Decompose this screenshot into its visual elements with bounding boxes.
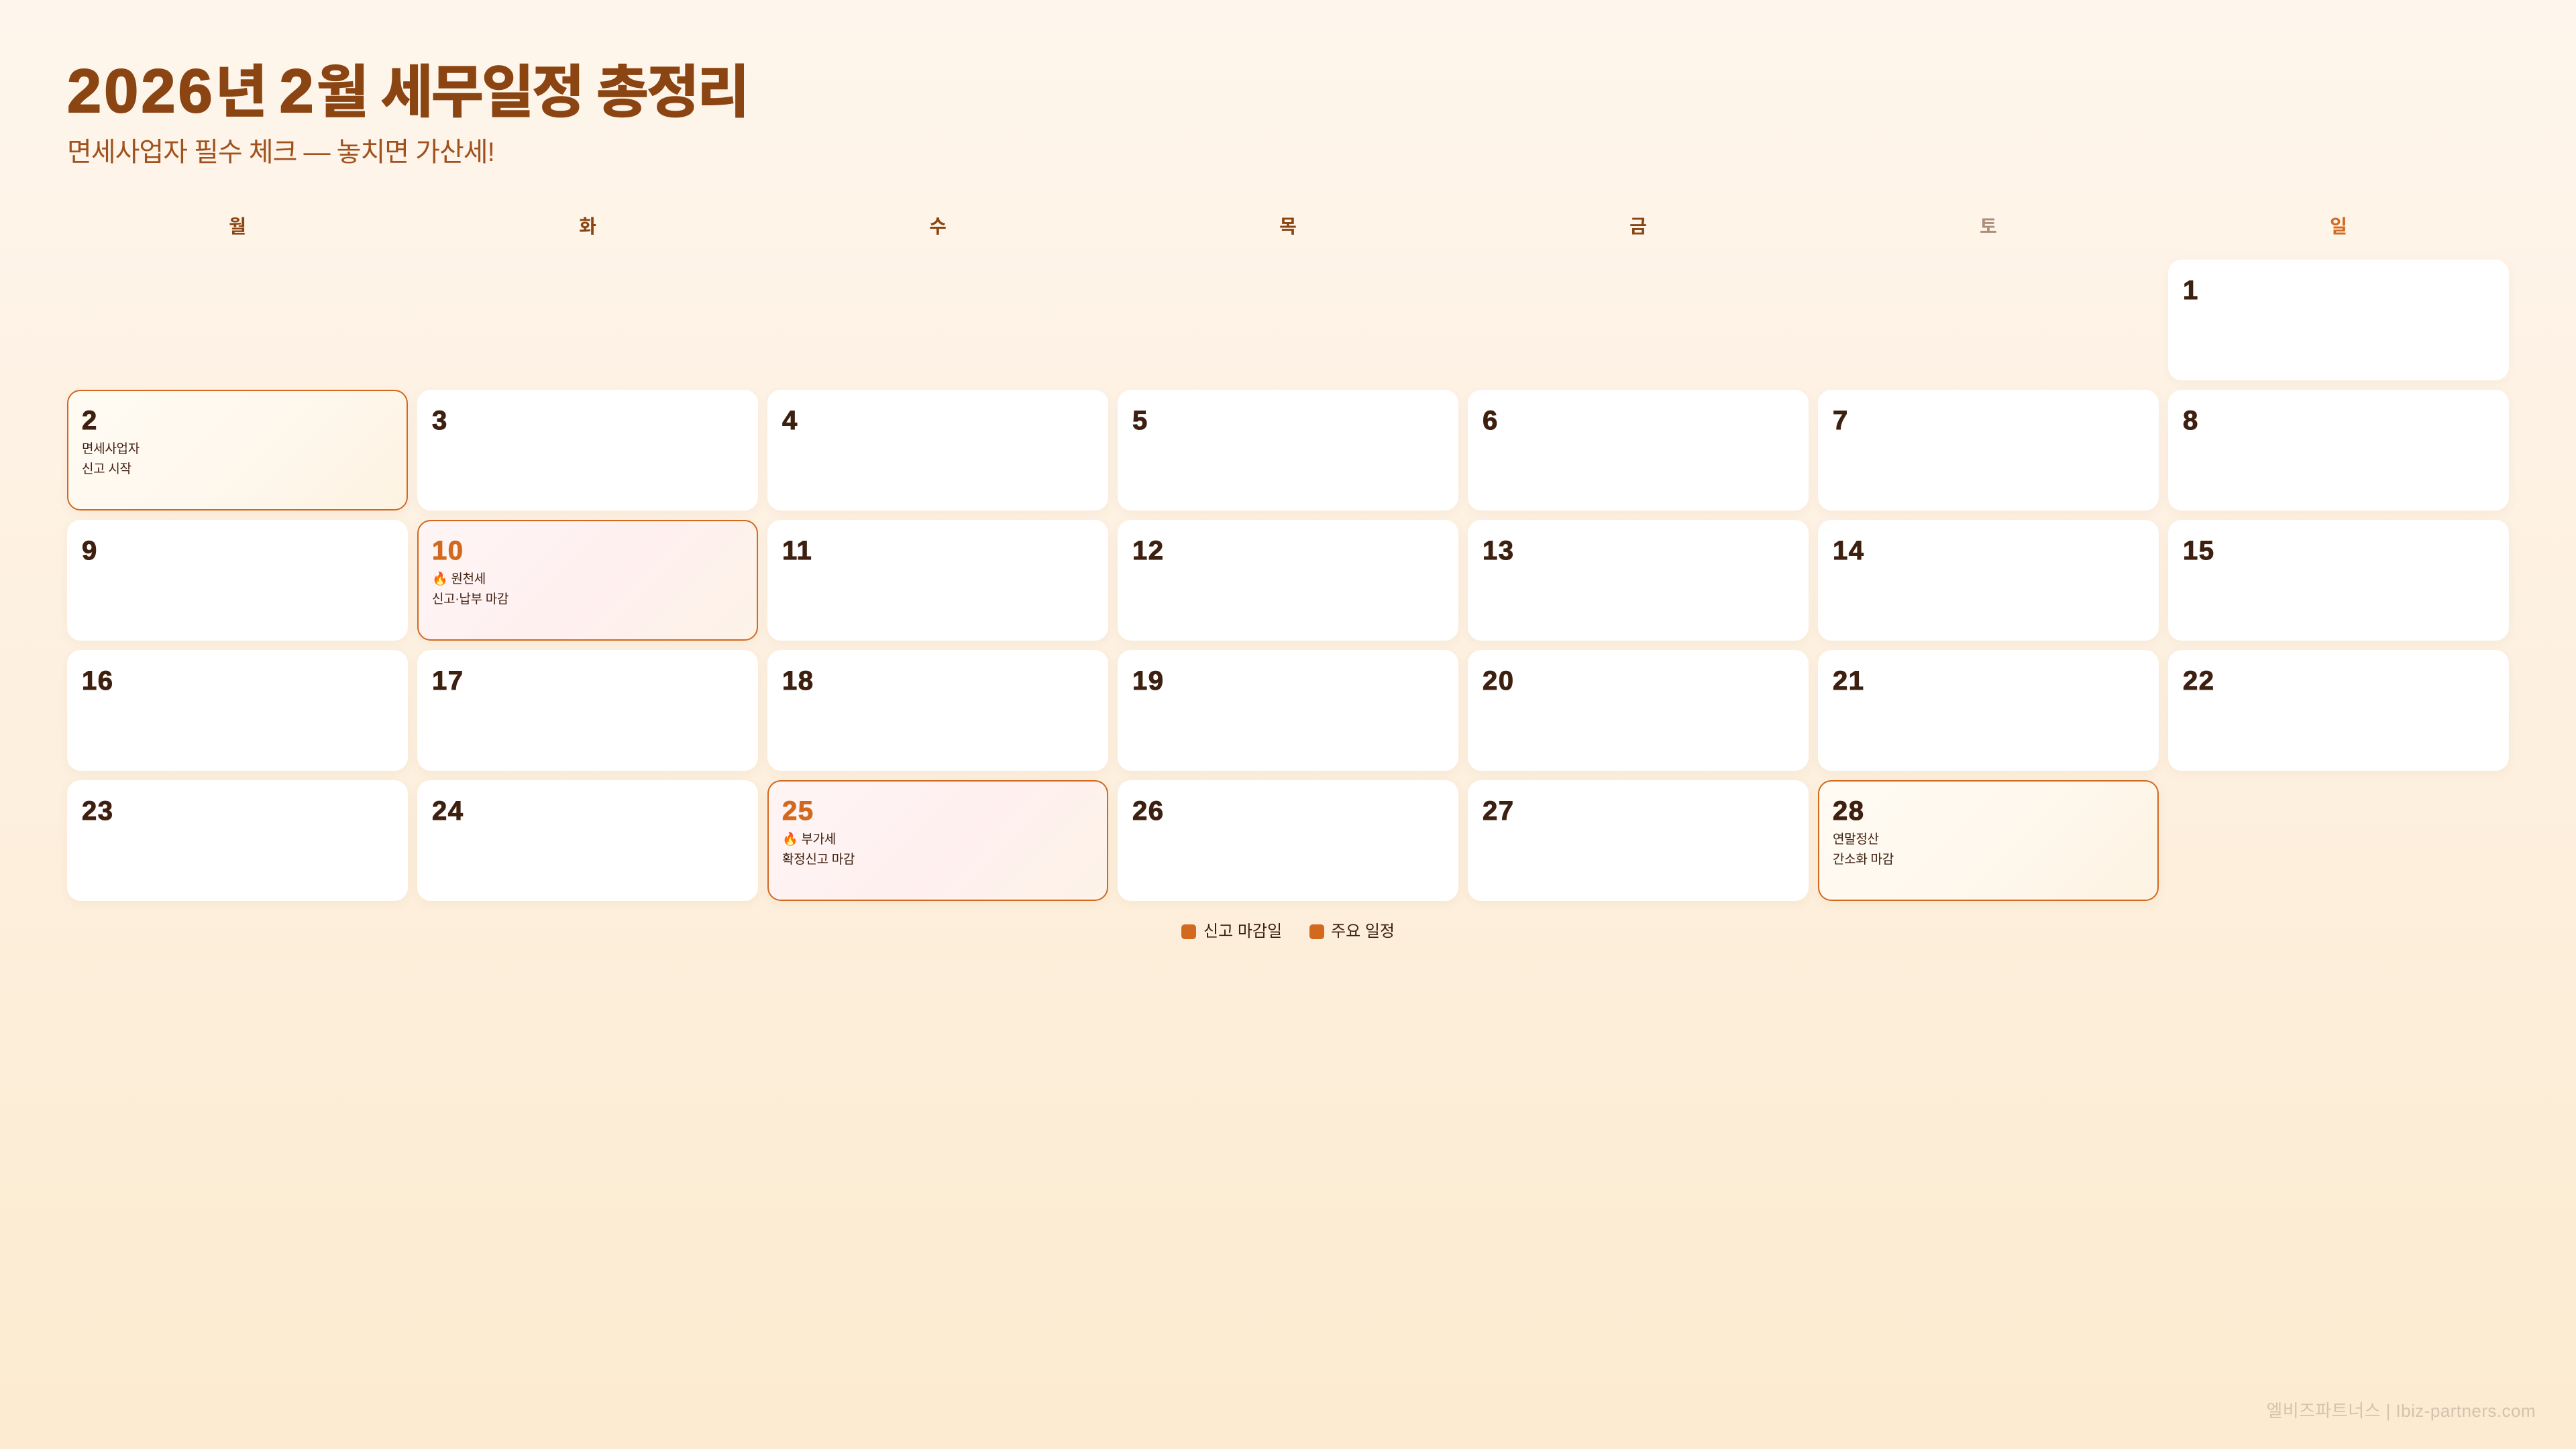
subtitle: 면세사업자 필수 체크 — 놓치면 가산세! <box>67 138 494 167</box>
day 6 <box>1468 390 1809 511</box>
day 12 <box>1118 520 1458 641</box>
day 25: VAT deadline: 확정신고 마감 <box>782 853 855 867</box>
day 23: 23 <box>82 796 114 826</box>
day 3: 3 <box>432 406 448 435</box>
day 18: 18 <box>782 666 814 696</box>
day 9 <box>67 520 408 641</box>
legend swatch: deadline <box>1181 924 1196 939</box>
day 28: year-end settlement: 간소화 마감 <box>1833 853 1894 867</box>
day 10: withholding tax deadline: 신고·납부 마감 <box>432 592 508 606</box>
day 10: withholding tax deadline <box>417 520 758 641</box>
legend label: deadline: 신고 마감일 <box>1203 922 1282 941</box>
day 21 <box>1818 650 2159 771</box>
day 6: 6 <box>1483 406 1499 435</box>
day 19 <box>1118 650 1458 771</box>
day 12: 12 <box>1132 536 1165 566</box>
weekday: Monday: 월 <box>229 216 246 237</box>
day 24 <box>417 780 758 901</box>
legend <box>1181 922 1395 941</box>
legend label: key date: 주요 일정 <box>1331 922 1395 941</box>
day 26 <box>1118 780 1458 901</box>
day 25: VAT deadline: 25 <box>782 796 814 826</box>
calendar grid <box>67 260 2509 901</box>
day 11 <box>767 520 1108 641</box>
day 24: 24 <box>432 796 464 826</box>
weekday: Wednesday: 수 <box>929 216 947 237</box>
day 13: 13 <box>1483 536 1515 566</box>
title: 2026년 2월 세무일정 총정리 <box>67 57 748 125</box>
day 26: 26 <box>1132 796 1165 826</box>
day 22 <box>2168 650 2509 771</box>
weekday header row <box>229 216 2347 237</box>
day 17: 17 <box>432 666 464 696</box>
weekday: Friday: 금 <box>1629 216 1647 237</box>
day 5: 5 <box>1132 406 1148 435</box>
day 10: withholding tax deadline: 10 <box>432 536 464 566</box>
day 4: 4 <box>782 406 798 435</box>
day 13 <box>1468 520 1809 641</box>
day 7: 7 <box>1833 406 1849 435</box>
day 25: VAT deadline <box>767 780 1108 901</box>
day 8: 8 <box>2183 406 2199 435</box>
day 27: 27 <box>1483 796 1515 826</box>
day 17 <box>417 650 758 771</box>
day 20 <box>1468 650 1809 771</box>
day 16 <box>67 650 408 771</box>
day 2: filing start: 2 <box>82 406 98 435</box>
weekday: Sunday: 일 <box>2330 216 2347 237</box>
day 14: 14 <box>1833 536 1865 566</box>
day 2: filing start: 면세사업자 <box>82 442 140 456</box>
day 18 <box>767 650 1108 771</box>
day 2: filing start: 신고 시작 <box>82 462 131 476</box>
day 27 <box>1468 780 1809 901</box>
day 23 <box>67 780 408 901</box>
day 1 <box>2168 260 2509 380</box>
day 15: 15 <box>2183 536 2215 566</box>
day 9: 9 <box>82 536 98 566</box>
day 5 <box>1118 390 1458 511</box>
day 28: year-end settlement <box>1818 780 2159 901</box>
day 3 <box>417 390 758 511</box>
day 25: VAT deadline: 🔥 부가세 <box>782 833 836 847</box>
day 8 <box>2168 390 2509 511</box>
footer credit: 엘비즈파트너스 | Ibiz-partners.com <box>2266 1401 2536 1421</box>
weekday: Tuesday: 화 <box>579 216 596 237</box>
day 15 <box>2168 520 2509 641</box>
day 16: 16 <box>82 666 114 696</box>
day 21: 21 <box>1833 666 1865 696</box>
day 19: 19 <box>1132 666 1165 696</box>
weekday: Saturday: 토 <box>1980 216 1997 237</box>
day 22: 22 <box>2183 666 2215 696</box>
day 10: withholding tax deadline: 🔥 원천세 <box>432 572 486 586</box>
day 2: filing start <box>67 390 408 511</box>
weekday: Thursday: 목 <box>1279 216 1297 237</box>
day 14 <box>1818 520 2159 641</box>
day 28: year-end settlement: 28 <box>1833 796 1865 826</box>
day 7 <box>1818 390 2159 511</box>
day 1: 1 <box>2183 276 2199 305</box>
day 28: year-end settlement: 연말정산 <box>1833 833 1879 847</box>
day 4 <box>767 390 1108 511</box>
day 20: 20 <box>1483 666 1515 696</box>
day 11: 11 <box>782 536 812 566</box>
legend swatch: key date <box>1309 924 1324 939</box>
